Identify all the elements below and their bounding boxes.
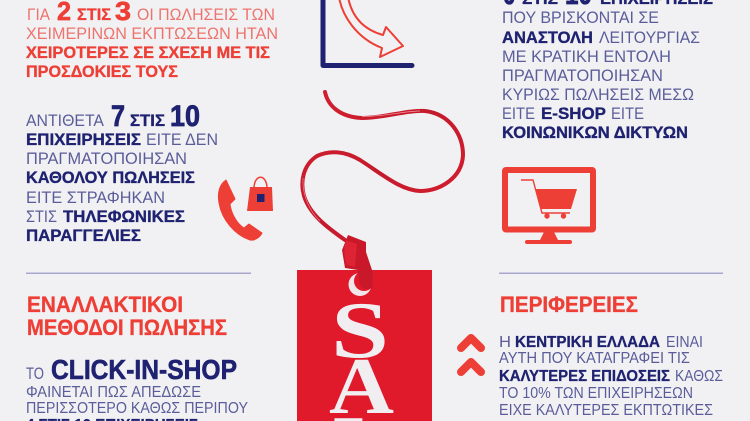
text line: 7 in 10: ΣΤΙΣ [130, 111, 165, 130]
divider [26, 272, 251, 274]
text line: 2 in 3: ΓΙΑ [27, 5, 51, 24]
text line: seems: ΦΑΙΝΕΤΑΙ ΠΩΣ ΑΠΕΔΩΣΕ [26, 384, 201, 401]
price tag [297, 235, 432, 421]
divider [499, 272, 723, 274]
text line: e-shop: ΕΙΤΕ [611, 104, 644, 123]
text line: central greece: ΚΕΝΤΡΙΚΗ ΕΛΛΑΔΑ [515, 334, 660, 351]
text line: e-shop [502, 104, 644, 123]
text line: 7 in 10: 10 [170, 100, 200, 133]
text line: 6 in 10 [503, 0, 713, 11]
text line: carried out: ΠΡΑΓΜΑΤΟΠΟΙΗΣΑΝ [502, 66, 663, 85]
text line: worse: ΧΕΙΡΟΤΕΡΕΣ ΣΕ ΣΧΕΣΗ ΜΕ ΤΙΣ [26, 43, 270, 62]
text line: to telephone: ΣΤΙΣ [26, 207, 57, 226]
text line: 7 in 10: ΑΝΤΙΘΕΤΑ [26, 111, 105, 130]
tag hole [348, 271, 374, 296]
text line: 7 in 10: 7 [111, 100, 125, 133]
text line: 10 percent: ΤΟ 10% ΤΩΝ ΕΠΙΧΕΙΡΗΣΕΩΝ [499, 385, 693, 402]
text line: businesses either not [26, 130, 218, 149]
text line: 2 in 3 [27, 0, 275, 26]
text line: best performance: ΚΑΘΩΣ [675, 368, 723, 385]
panel: 7 in 10 businesses [26, 100, 218, 245]
tag letter S: S [331, 287, 389, 375]
knot [342, 235, 373, 289]
heading: regions: ΠΕΡΙΦΕΡΕΙΕΣ [500, 292, 638, 317]
text line: suspension [502, 28, 700, 47]
ribbon [302, 92, 463, 240]
text line: or turned: ΕΙΤΕ ΣΤΡΑΦΗΚΑΝ [26, 188, 165, 207]
text line: records: ΑΥΤΗ ΠΟΥ ΚΑΤΑΓΡΑΦΕΙ ΤΙΣ [499, 350, 690, 367]
text line: e-shop: E-SHOP [541, 104, 606, 123]
text line: no sales: ΚΑΘΟΛΟΥ ΠΩΛΗΣΕΙΣ [26, 168, 195, 187]
text line: 7 in 10 [26, 100, 200, 133]
text line: 2 in 3: ΟΙ ΠΩΛΗΣΕΙΣ ΤΩΝ [137, 5, 275, 24]
text line: central greece: Η [499, 334, 511, 351]
text line: social networks: ΚΟΙΝΩΝΙΚΩΝ ΔΙΚΤΥΩΝ [502, 123, 688, 142]
icon: monitor with shopping cart [505, 170, 593, 244]
text line: mainly sales: ΚΥΡΙΩΣ ΠΩΛΗΣΕΙΣ ΜΕΣΩ [502, 85, 694, 104]
text line: businesses either not: ΕΙΤΕ ΔΕΝ [146, 130, 218, 149]
icon: double chevron up [461, 338, 481, 372]
heading: alternative: ΕΝΑΛΛΑΚΤΙΚΟΙ [27, 292, 183, 317]
icon: falling arrow chart [323, 0, 412, 66]
icon: phone and shopping bag [218, 177, 273, 240]
text line: 2 in 3: ΣΤΙΣ [77, 5, 111, 24]
text line: click in shop: CLICK-IN-SHOP [51, 354, 237, 385]
text line: orders: ΠΑΡΑΓΓΕΛΙΕΣ [26, 226, 141, 245]
text line: expectations: ΠΡΟΣΔΟΚΙΕΣ ΤΟΥΣ [26, 62, 178, 81]
text line: located: ΠΟΥ ΒΡΙΣΚΟΝΤΑΙ ΣΕ [502, 8, 659, 27]
panel: regions [499, 292, 723, 421]
text line: suspension: ΑΝΑΣΤΟΛΗ [502, 28, 593, 47]
text line: suspension: ΛΕΙΤΟΥΡΓΙΑΣ [599, 28, 700, 47]
text line: carried out: ΠΡΑΓΜΑΤΟΠΟΙΗΣΑΝ [26, 149, 187, 168]
heading: sales methods: ΜΕΘΟΔΟΙ ΠΩΛΗΣΗΣ [27, 315, 227, 340]
text line: central greece: ΕΙΝΑΙ [666, 334, 703, 351]
text line: click in shop: ΤΟ [26, 364, 44, 383]
text line: more: ΠΕΡΙΣΣΟΤΕΡΟ ΚΑΘΩΣ ΠΕΡΙΠΟΥ [26, 400, 248, 417]
text line: businesses either not: ΕΠΙΧΕΙΡΗΣΕΙΣ [26, 130, 141, 149]
text line: winter sales: ΧΕΙΜΕΡΙΝΩΝ ΕΚΠΤΩΣΕΩΝ ΗΤΑΝ [26, 24, 278, 43]
panel: alternative sales methods [26, 292, 248, 421]
text line: had better: ΕΙΧΕ ΚΑΛΥΤΕΡΕΣ ΕΚΠΤΩΤΙΚΕΣ [499, 402, 713, 419]
text line: best performance: ΚΑΛΥΤΕΡΕΣ ΕΠΙΔΟΣΕΙΣ [499, 368, 670, 385]
panel: winter sales expectations [26, 0, 278, 81]
text line: to telephone: ΤΗΛΕΦΩΝΙΚΕΣ [63, 207, 185, 226]
panel: suspended businesses [502, 0, 713, 142]
text line: state order: ΜΕ ΚΡΑΤΙΚΗ ΕΝΤΟΛΗ [502, 47, 671, 66]
text line: e-shop: ΕΙΤΕ [502, 104, 535, 123]
